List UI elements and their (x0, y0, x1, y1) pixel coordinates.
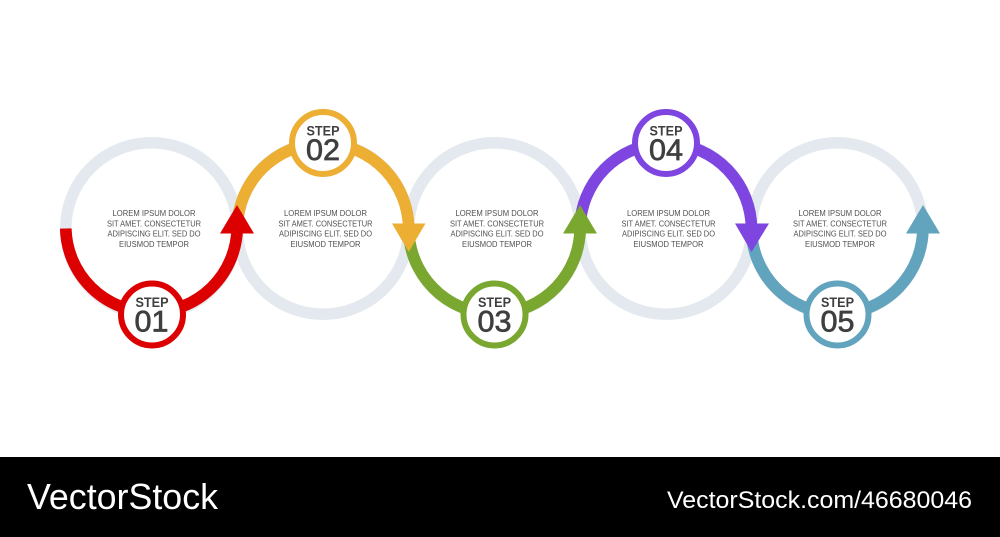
badge: step 05 (806, 284, 868, 346)
text block: step 01: EIUSMOD TEMPOR (119, 239, 189, 249)
arrow: step 04 purple (735, 224, 769, 252)
arrow: step 02 yellow (392, 224, 426, 252)
badge: step 01: 01 (134, 306, 168, 338)
badge: step 01 (121, 284, 183, 346)
text block: step 02: SIT AMET. CONSECTETUR (278, 218, 372, 228)
text block: step 01: SIT AMET. CONSECTETUR (107, 218, 201, 228)
text block: step 02 (278, 208, 372, 249)
text block: step 03: SIT AMET. CONSECTETUR (450, 218, 544, 228)
badge: step 02: STEP (306, 124, 340, 138)
badge: step 02: 02 (306, 134, 340, 167)
text block: step 02: LOREM IPSUM DOLOR (284, 208, 367, 218)
background rings (66, 143, 923, 314)
badge: step 03: 03 (478, 306, 512, 338)
arrow: step 03 green (563, 205, 597, 234)
arrow: step 01 red (220, 205, 254, 234)
badge: step 03: STEP (478, 295, 511, 310)
badge: step 01: STEP (136, 295, 168, 310)
text block: step 03: ADIPISCING ELIT. SED DO (450, 228, 544, 238)
text block: step 03: LOREM IPSUM DOLOR (456, 208, 538, 218)
footer logo: VectorStock (27, 476, 219, 517)
text block: step 05: SIT AMET. CONSECTETUR (793, 218, 887, 228)
text block: step 05: LOREM IPSUM DOLOR (798, 208, 882, 218)
text block: step 05: EIUSMOD TEMPOR (805, 239, 875, 249)
text block: step 04 (622, 208, 716, 249)
arc: step 05 blue (752, 228, 923, 314)
text block: step 03 (450, 208, 544, 249)
text block: step 02: EIUSMOD TEMPOR (290, 239, 360, 249)
badge: step 02 (292, 112, 354, 174)
text block: step 01: LOREM IPSUM DOLOR (112, 208, 196, 218)
footer url: VectorStock.com/46680046 (667, 487, 972, 514)
footer bar (0, 457, 1000, 537)
badge: step 04 (635, 112, 697, 174)
badge: step 05: STEP (821, 295, 854, 310)
text block: step 03: EIUSMOD TEMPOR (462, 239, 532, 249)
arc: step 02 yellow (238, 143, 409, 228)
arrow: step 05 blue (906, 205, 940, 234)
text block: step 04: LOREM IPSUM DOLOR (627, 208, 710, 218)
badge: step 05: 05 (820, 306, 854, 338)
text block: step 05 (793, 208, 887, 249)
badge: step 04: 04 (649, 134, 683, 167)
text block: step 04: ADIPISCING ELIT. SED DO (622, 228, 715, 238)
arc: step 01 red (66, 228, 237, 312)
arc: step 03 green (409, 228, 580, 314)
text block: step 04: EIUSMOD TEMPOR (634, 239, 704, 249)
text block: step 02: ADIPISCING ELIT. SED DO (279, 228, 372, 238)
badge: step 03 (464, 284, 526, 346)
arc: step 04 purple (581, 143, 752, 228)
text block: step 04: SIT AMET. CONSECTETUR (622, 218, 716, 228)
text block: step 01: ADIPISCING ELIT. SED DO (108, 228, 201, 238)
text block: step 01 (107, 208, 201, 249)
text block: step 05: ADIPISCING ELIT. SED DO (794, 228, 887, 238)
badge: step 04: STEP (650, 124, 682, 138)
